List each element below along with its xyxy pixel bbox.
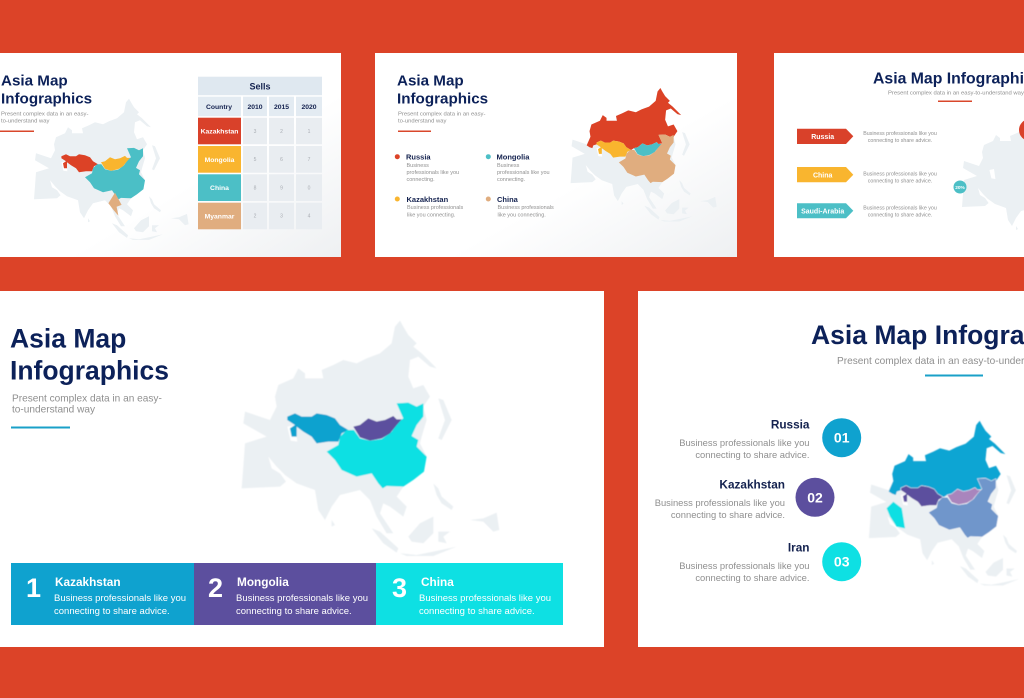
subtitle: to-understand way — [398, 118, 447, 124]
subtitle: Present complex data in an easy- — [1, 112, 88, 118]
legend: Kazakhstan: like you connecting. — [407, 212, 456, 218]
accent line — [925, 374, 983, 376]
panel: table slide — [0, 53, 341, 257]
item: Russia: Business professionals like you — [679, 437, 810, 448]
panel: numbered circles slide — [638, 291, 1024, 647]
heading: Infographics — [397, 90, 488, 108]
arrow label: Russia: Russia — [811, 134, 834, 141]
legend: Mongolia: Mongolia — [496, 152, 530, 162]
legend: China: China — [497, 195, 519, 204]
table: sells: 3 — [254, 129, 257, 135]
panel: numbered bar slide — [0, 291, 604, 647]
heading: Infographics — [10, 356, 169, 386]
accent line — [0, 130, 34, 132]
legend: Mongolia: Business — [497, 163, 519, 169]
item: Iran — [679, 540, 810, 583]
segment: Kazakhstan: connecting to share advice. — [54, 606, 170, 617]
item: Iran: Business professionals like you — [679, 560, 810, 571]
item: Russia: Russia — [771, 418, 810, 432]
legend: China: Business professionals — [498, 205, 554, 211]
item: Kazakhstan: Business professionals like you — [655, 497, 785, 508]
table: sells: 8 — [254, 186, 257, 192]
text: Saudi-Arabia description: connecting to share advice. — [868, 212, 932, 218]
legend: Kazakhstan — [395, 195, 464, 218]
segment: China — [376, 563, 563, 625]
item: Russia — [679, 418, 810, 460]
table: sells: 2015 — [274, 104, 289, 111]
table: sells: Kazakhstan — [201, 128, 238, 136]
map: Kazakhstan Mongolia China — [242, 321, 499, 556]
table: sells: 2 — [254, 214, 257, 220]
table: sells: 0 — [308, 186, 311, 192]
segment: Kazakhstan: 1 — [26, 573, 41, 603]
segment: Mongolia: connecting to share advice. — [236, 606, 352, 617]
map: China Kazakhstan Mongolia Myanmar — [34, 99, 189, 240]
item: Iran: Iran — [788, 540, 810, 554]
segment: China: Business professionals like you — [419, 593, 551, 604]
legend: Kazakhstan: Kazakhstan — [406, 195, 449, 204]
item: Kazakhstan: connecting to share advice. — [671, 509, 785, 520]
heading: Asia Map — [1, 72, 68, 90]
segment: China: 3 — [392, 573, 407, 603]
subtitle: to-understand way — [1, 118, 50, 124]
table: sells: 6 — [280, 157, 283, 163]
badge: 03 — [822, 542, 861, 581]
table: sells: 5 — [254, 157, 257, 163]
segment: Mongolia: Business professionals like you — [236, 593, 368, 604]
table: sells: Myanmar — [205, 214, 235, 220]
legend: Russia: connecting. — [406, 177, 435, 183]
badge: 02: 02 — [807, 489, 823, 505]
text: China description: connecting to share advice. — [868, 178, 932, 184]
legend: Russia: professionals like you — [406, 170, 459, 176]
badge: 03: 03 — [834, 554, 850, 570]
item: Iran: connecting to share advice. — [695, 572, 810, 583]
legend: Russia — [395, 152, 459, 183]
arrow label: Russia — [797, 129, 853, 144]
map: Russia Kazakhstan Mongolia China — [571, 88, 717, 221]
accent line — [938, 100, 972, 102]
subtitle: to-understand way — [12, 404, 96, 416]
panel: arrows slide — [774, 53, 1024, 257]
table: sells: 3 — [280, 214, 283, 220]
segment: China: China — [421, 575, 454, 589]
percent badge: teal: 20% — [955, 185, 966, 191]
table: sells: 7 — [308, 157, 311, 163]
map: Russia Kazakhstan Mongolia China Iran — [869, 421, 1024, 585]
segment: Kazakhstan: Kazakhstan — [55, 575, 121, 589]
table: sells: Sells — [249, 82, 271, 92]
legend: China — [486, 195, 554, 218]
badge: 01 — [822, 418, 861, 457]
arrow label: China — [797, 167, 853, 182]
accent line — [398, 130, 431, 132]
table: sells: 9 — [280, 186, 283, 192]
accent line — [11, 426, 70, 428]
heading: Asia Map — [397, 72, 464, 90]
table: sells: 1 — [308, 129, 311, 135]
badge: 01: 01 — [834, 430, 850, 446]
heading: Asia Map — [10, 324, 126, 354]
table: sells: China — [210, 185, 229, 192]
legend: Kazakhstan: Business professionals — [407, 205, 463, 211]
text: Saudi-Arabia description: Business professionals like you — [863, 206, 937, 212]
segment: Kazakhstan: Business professionals like you — [54, 593, 186, 604]
legend: Mongolia: professionals like you — [497, 170, 550, 176]
segment: Mongolia: 2 — [208, 573, 223, 603]
subtitle: Present complex data in an easy- — [398, 112, 485, 118]
text: Russia description: connecting to share advice. — [868, 138, 932, 144]
map: partial Asia — [962, 106, 1024, 248]
legend: Russia: Business — [406, 163, 429, 169]
legend: Mongolia: connecting. — [497, 177, 526, 183]
arrow label: Saudi-Arabia: Saudi-Arabia — [801, 208, 844, 216]
heading: Infographics — [1, 90, 92, 108]
text: China description: Business professionals like you — [863, 172, 937, 178]
item: Russia: connecting to share advice. — [695, 449, 810, 460]
table: sells: Mongolia — [205, 157, 235, 164]
text: Russia description: Business professionals like you — [863, 131, 937, 137]
table: sells: 4 — [308, 214, 311, 220]
table: sells — [198, 77, 322, 229]
badge: 02 — [796, 478, 834, 517]
table: sells: 2 — [280, 129, 283, 135]
legend: China: like you connecting. — [498, 212, 546, 218]
segment: China: connecting to share advice. — [419, 606, 535, 617]
panel: legend slide — [375, 53, 737, 257]
table: sells: Country — [206, 104, 232, 111]
arrow label: Saudi-Arabia — [797, 203, 853, 218]
segment: Mongolia: Mongolia — [237, 575, 289, 589]
percent badge: teal — [954, 180, 966, 194]
percent badge: red — [1019, 119, 1024, 141]
item: Kazakhstan: Kazakhstan — [719, 478, 785, 492]
arrow label: China: China — [813, 172, 833, 180]
segment: Kazakhstan — [11, 563, 194, 625]
table: sells: 2020 — [301, 104, 317, 111]
legend: Mongolia — [486, 152, 550, 183]
table: sells: 2010 — [247, 104, 263, 111]
legend: Russia: Russia — [406, 152, 431, 162]
segment: Mongolia — [194, 563, 376, 625]
subtitle: Present complex data in an easy-to-understand way — [888, 90, 1024, 96]
subtitle: Present complex data in an easy- — [12, 394, 162, 404]
item: Kazakhstan — [655, 478, 785, 520]
